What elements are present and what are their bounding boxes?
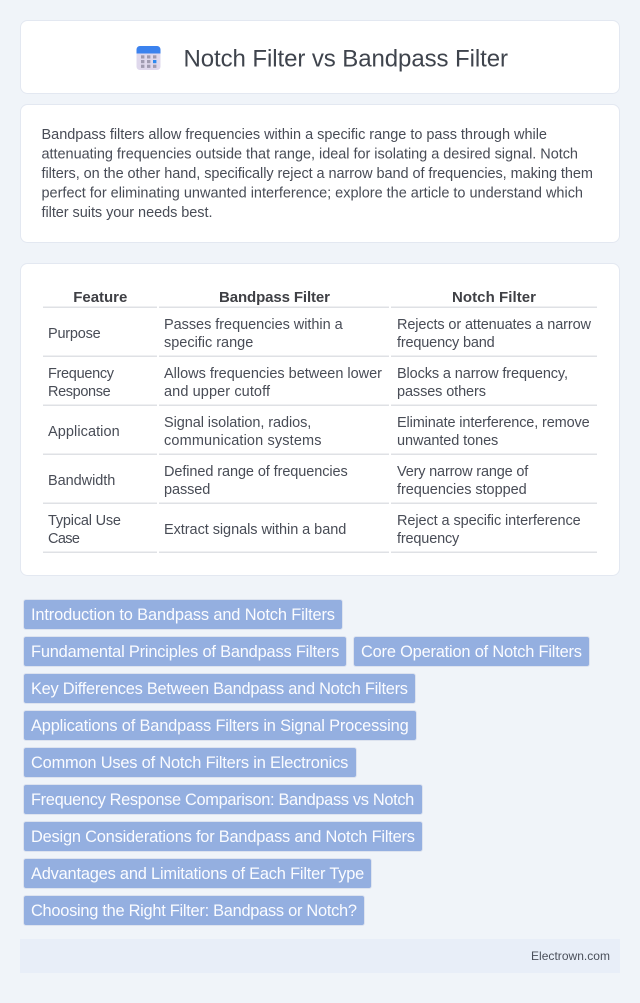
table header row: Notch Filter — [452, 289, 536, 306]
tag: advantages and limitations — [24, 858, 372, 888]
tag: introduction: Introduction to Bandpass and Notch Filters — [31, 606, 335, 624]
panel: title header — [20, 20, 620, 94]
title: Notch Filter vs Bandpass Filter — [184, 46, 508, 73]
tag: design considerations: Design Considerations for Bandpass and Notch Filters — [31, 828, 415, 846]
tag: frequency response comparison: Frequency Response Comparison: Bandpass vs Notch — [31, 791, 414, 809]
tag: fundamental principles — [24, 636, 346, 666]
table row: purpose: specific range — [164, 335, 253, 351]
text block: intro paragraph: filter suits your needs best. — [42, 205, 212, 221]
table row: purpose: Purpose — [48, 326, 101, 342]
text block: intro paragraph: Bandpass filters allow frequencies within a specific range to pass through while — [42, 127, 547, 143]
table row: typical use case: Case — [48, 531, 80, 547]
table row: application — [48, 415, 590, 449]
table row: bandwidth: frequencies stopped — [397, 482, 527, 498]
tag: choosing the right filter — [24, 896, 364, 926]
tag: common uses — [24, 748, 356, 778]
table row: frequency response — [48, 366, 568, 400]
panel: comparison table — [20, 264, 620, 576]
tag: introduction — [24, 600, 342, 630]
tag: applications: Applications of Bandpass Filters in Signal Processing — [31, 717, 409, 735]
table row: bandwidth: Very narrow range of — [397, 464, 529, 480]
text block: intro paragraph: attenuating frequencies outside that range, ideal for isolating a desired signal. Notch — [42, 146, 578, 162]
icon: calendar grid — [136, 46, 160, 70]
text block: intro paragraph: perfect for eliminating unwanted interference; explore the article to understand which — [42, 186, 583, 202]
table header row: Feature — [73, 289, 127, 306]
table row: application: Eliminate interference, remove — [397, 415, 590, 431]
table header row: Bandpass Filter — [219, 289, 330, 306]
table row: application: unwanted tones — [397, 433, 498, 449]
footer bar — [20, 939, 620, 973]
table row: bandwidth — [48, 464, 529, 498]
table row: application: Signal isolation, radios, — [164, 415, 311, 431]
section tags — [24, 600, 590, 926]
tag: fundamental principles: Fundamental Principles of Bandpass Filters — [31, 643, 339, 661]
text block: intro paragraph — [42, 127, 593, 221]
table row: typical use case — [48, 513, 581, 547]
table row: purpose: frequency band — [397, 335, 495, 351]
table row: purpose: Rejects or attenuates a narrow — [397, 317, 592, 333]
table row: typical use case: Extract signals within a band — [164, 522, 346, 538]
table header row — [73, 289, 536, 306]
panel: introduction text — [20, 104, 620, 242]
table row: frequency response: Blocks a narrow frequency, — [397, 366, 568, 382]
table row: typical use case: Reject a specific interference — [397, 513, 581, 529]
table row: frequency response: passes others — [397, 384, 486, 400]
tag: applications — [24, 710, 416, 740]
table row: frequency response: Response — [48, 384, 111, 400]
tag: design considerations — [24, 822, 422, 852]
tag: key differences — [24, 674, 416, 704]
table row: bandwidth: Bandwidth — [48, 473, 115, 489]
tag: key differences: Key Differences Between Bandpass and Notch Filters — [31, 680, 408, 698]
table row: bandwidth: Defined range of frequencies — [164, 464, 348, 480]
tag: core operation: Core Operation of Notch Filters — [361, 643, 582, 661]
table row: purpose: Passes frequencies within a — [164, 317, 344, 333]
tag: frequency response comparison — [24, 784, 422, 814]
tag: advantages and limitations: Advantages and Limitations of Each Filter Type — [31, 865, 364, 883]
tag: common uses: Common Uses of Notch Filters in Electronics — [31, 754, 348, 772]
table row: application: communication systems — [164, 433, 322, 449]
table row: application: Application — [48, 424, 120, 440]
tag: choosing the right filter: Choosing the Right Filter: Bandpass or Notch? — [31, 902, 357, 920]
table row: frequency response: Allows frequencies between lower — [164, 366, 382, 382]
table row: typical use case: frequency — [397, 531, 460, 547]
footer bar: Electrown.com — [531, 949, 610, 963]
table row: purpose — [48, 317, 592, 351]
table row: bandwidth: passed — [164, 482, 210, 498]
table row: frequency response: Frequency — [48, 366, 115, 382]
text block: intro paragraph: filters, on the other hand, specifically reject a narrow band of frequencies, making them — [42, 166, 593, 182]
tag: core operation — [354, 636, 590, 666]
table row: frequency response: and upper cutoff — [164, 384, 271, 400]
table row: typical use case: Typical Use — [48, 513, 121, 529]
